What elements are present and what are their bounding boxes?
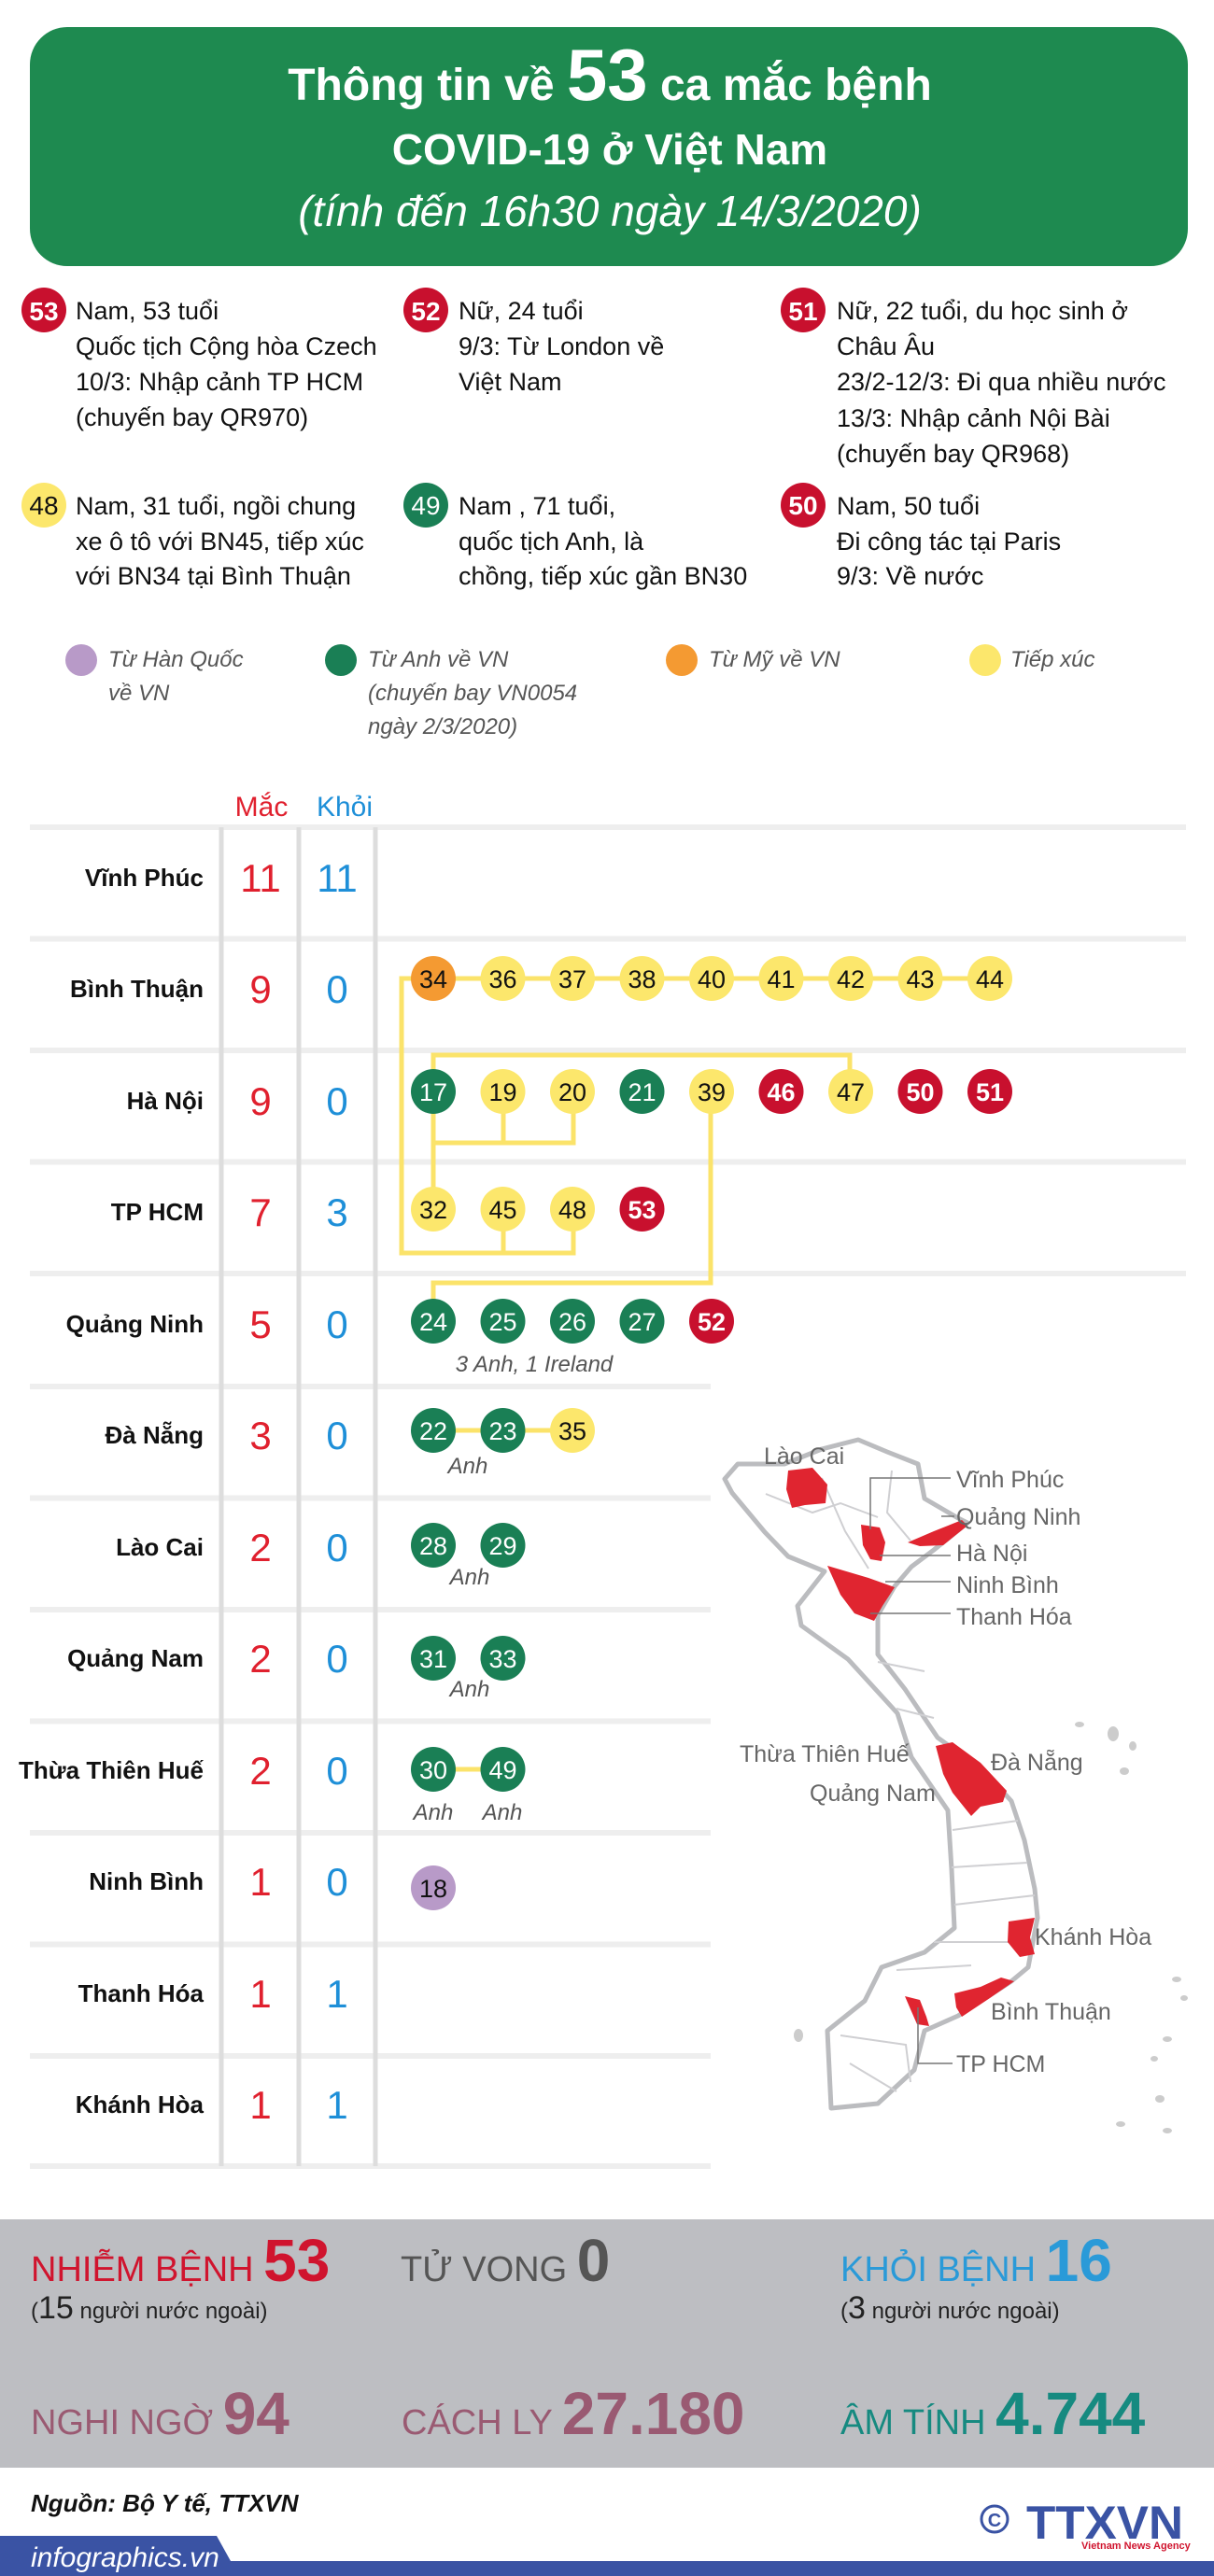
Binh Thuan cases: 41	[767, 965, 796, 993]
province names: Quảng Nam	[67, 1644, 204, 1672]
infected counts: 1	[249, 1972, 272, 2016]
Ha Noi cases: 47	[837, 1078, 865, 1106]
infected counts: 3	[249, 1414, 272, 1457]
legend: UK	[325, 644, 577, 739]
case 53: 53	[29, 297, 59, 326]
map labels: Lào Cai	[764, 1443, 844, 1470]
Quang Nam cases	[411, 1636, 525, 1681]
case 48	[21, 483, 364, 590]
legend: Korea	[65, 644, 244, 706]
recovered counts: 3	[326, 1190, 348, 1234]
stat: infected: NHIỄM BỆNH 53	[31, 2227, 330, 2294]
Da Nang cases	[411, 1408, 595, 1453]
stat: negative: ÂM TÍNH 4.744	[840, 2380, 1146, 2447]
map of Vietnam	[725, 1440, 1188, 2133]
Thua Thien Hue cases: 49	[488, 1756, 517, 1784]
infected counts: 9	[249, 967, 272, 1011]
map labels: Quảng Ninh	[956, 1504, 1080, 1530]
province names: Lào Cai	[116, 1533, 204, 1561]
Binh Thuan cases: 44	[976, 965, 1004, 993]
footer bar: infographics.vn	[31, 2542, 219, 2573]
stat: deaths: TỬ VONG 0	[401, 2227, 610, 2294]
Ha Noi cases: 51	[976, 1078, 1004, 1106]
province names: Quảng Ninh	[66, 1310, 204, 1338]
Da Nang cases: 22	[419, 1417, 447, 1445]
date line: (tính đến 16h30 ngày 14/3/2020)	[298, 187, 922, 235]
stat: recovered	[840, 2227, 1112, 2326]
case 50: Đi công tác tại Paris	[837, 528, 1061, 556]
subtitle: COVID-19 ở Việt Nam	[392, 125, 827, 174]
Quang Nam cases: 31	[419, 1645, 447, 1673]
case 49: chồng, tiếp xúc gần BN30	[459, 562, 747, 590]
case 48: xe ô tô với BN45, tiếp xúc	[76, 528, 364, 556]
map labels: Quảng Nam	[810, 1781, 936, 1807]
map labels: Hà Nội	[956, 1541, 1027, 1567]
logo: TTXVN: Vietnam News Agency	[1081, 2541, 1192, 2552]
map outline	[725, 1440, 1038, 2108]
infected counts	[240, 856, 281, 2127]
legend: UK: (chuyến bay VN0054	[368, 681, 577, 706]
legend: Korea: về VN	[108, 681, 170, 706]
case 49: Nam , 71 tuổi,	[459, 492, 615, 520]
recovered counts: 0	[326, 967, 348, 1011]
Ha Noi cases: 21	[628, 1078, 656, 1106]
case details	[21, 288, 1166, 590]
nationality notes: Anh	[412, 1800, 453, 1825]
stats band	[0, 2219, 1214, 2468]
header banner	[30, 27, 1188, 266]
stat: recovered: (3 người nước ngoài)	[840, 2290, 1060, 2326]
Ha Noi cases: 46	[767, 1078, 796, 1106]
case 51: Nữ, 22 tuổi, du học sinh ở	[837, 297, 1128, 325]
recovered counts: 0	[326, 1526, 348, 1570]
Ninh Binh case: 18	[419, 1875, 447, 1903]
title: Thông tin về 53 ca mắc bệnh	[288, 34, 932, 116]
infected counts: 9	[249, 1079, 272, 1123]
infected counts: 1	[249, 1860, 272, 1904]
logo: TTXVN: TTXVN	[1026, 2497, 1183, 2549]
infected counts: 2	[249, 1637, 272, 1681]
legend	[65, 644, 1094, 739]
case 50: 9/3: Về nước	[837, 562, 983, 590]
Binh Thuan cases	[411, 956, 1012, 1001]
Thua Thien Hue cases	[411, 1747, 525, 1792]
Quang Ninh cases: 52	[698, 1308, 726, 1336]
map labels: Bình Thuận	[991, 1999, 1111, 2025]
map labels: Thanh Hóa	[956, 1604, 1072, 1630]
recovered counts: 1	[326, 2083, 348, 2127]
TP HCM cases	[411, 1187, 665, 1232]
case 48: 48	[29, 491, 59, 520]
case 51: 23/2-12/3: Đi qua nhiều nước	[837, 368, 1166, 396]
map labels: Đà Nẵng	[991, 1749, 1083, 1776]
Ha Noi cases: 20	[558, 1078, 586, 1106]
Quang Ninh cases: 25	[488, 1308, 517, 1336]
TP HCM cases: 45	[488, 1196, 517, 1224]
Quang Ninh cases: 26	[558, 1308, 586, 1336]
bubbles: case numbers	[411, 956, 1012, 1910]
Ha Noi cases: 50	[906, 1078, 935, 1106]
province names	[19, 864, 205, 2119]
map red provinces	[786, 1468, 1035, 2026]
Ha Noi cases: 17	[419, 1078, 447, 1106]
Lao Cai cases: 28	[419, 1532, 447, 1560]
Quang Ninh cases: 27	[628, 1308, 656, 1336]
Da Nang cases: 23	[488, 1417, 517, 1445]
legend: contact	[969, 644, 1094, 676]
case 50: Nam, 50 tuổi	[837, 492, 980, 520]
Ha Noi cases	[411, 1069, 1012, 1114]
stat: infected	[31, 2227, 330, 2326]
map province borders	[766, 1471, 1035, 2091]
map labels: TP HCM	[956, 2051, 1045, 2077]
province names: Vĩnh Phúc	[85, 864, 204, 892]
legend: contact: Tiếp xúc	[1010, 647, 1094, 672]
province names: Thừa Thiên Huế	[19, 1756, 205, 1784]
map labels: Thừa Thiên Huế	[740, 1741, 910, 1767]
TP HCM cases: 48	[558, 1196, 586, 1224]
Quang Nam cases: 33	[488, 1645, 517, 1673]
case 49: 49	[411, 491, 441, 520]
case 49: quốc tịch Anh, là	[459, 528, 644, 556]
map labels: Khánh Hòa	[1035, 1924, 1151, 1950]
map labels: Vĩnh Phúc	[956, 1467, 1064, 1493]
province names: Đà Nẵng	[106, 1421, 204, 1449]
legend: UK: ngày 2/3/2020)	[368, 714, 517, 739]
recovered counts: 11	[317, 856, 358, 900]
Quang Ninh cases	[411, 1299, 734, 1344]
case 50	[781, 483, 1061, 590]
Ha Noi cases: 19	[488, 1078, 517, 1106]
stat: quarantine: CÁCH LY 27.180	[402, 2380, 745, 2447]
recovered counts: 0	[326, 1079, 348, 1123]
infected counts: 7	[249, 1190, 272, 1234]
column headers	[235, 792, 373, 823]
recovered counts	[317, 856, 358, 2127]
TP HCM cases: 53	[628, 1196, 656, 1224]
recovered counts: 0	[326, 1637, 348, 1681]
case 52: Việt Nam	[459, 368, 562, 396]
recovered counts: 0	[326, 1302, 348, 1346]
case 51: (chuyến bay QR968)	[837, 440, 1069, 468]
column headers: Mắc	[235, 792, 288, 823]
nationality notes: Anh	[448, 1677, 489, 1702]
case 52: 9/3: Từ London về	[459, 332, 664, 360]
Da Nang cases: 35	[558, 1417, 586, 1445]
infected counts: 5	[249, 1302, 272, 1346]
case 52: 52	[411, 297, 441, 326]
table grid	[30, 827, 1186, 2166]
stat: recovered: KHỎI BỆNH 16	[840, 2227, 1112, 2294]
footer bar	[0, 2536, 1214, 2576]
case 52: Nữ, 24 tuổi	[459, 297, 584, 325]
TP HCM cases: 32	[419, 1196, 447, 1224]
recovered counts: 1	[326, 1972, 348, 2016]
map labels: Ninh Bình	[956, 1572, 1059, 1598]
recovered counts: 0	[326, 1860, 348, 1904]
province names: Bình Thuận	[70, 975, 204, 1003]
map islands	[794, 1722, 1188, 2133]
case 48: với BN34 tại Bình Thuận	[76, 562, 351, 590]
case 52	[403, 288, 664, 396]
stat: infected: (15 người nước ngoài)	[31, 2290, 268, 2326]
column headers: Khỏi	[317, 792, 373, 823]
infected counts: 11	[240, 856, 281, 900]
case 53: Nam, 53 tuổi	[76, 297, 219, 325]
case 51	[781, 288, 1166, 468]
Quang Ninh cases: 24	[419, 1308, 447, 1336]
source: Nguồn: Bộ Y tế, TTXVN	[31, 2489, 300, 2517]
case 53: (chuyến bay QR970)	[76, 403, 308, 431]
Ninh Binh case	[411, 1865, 456, 1910]
case 53: Quốc tịch Cộng hòa Czech	[76, 332, 377, 360]
Lao Cai cases: 29	[488, 1532, 517, 1560]
case 49	[403, 483, 747, 590]
case 51: Châu Âu	[837, 331, 935, 360]
case 53: 10/3: Nhập cảnh TP HCM	[76, 368, 363, 396]
Binh Thuan cases: 36	[488, 965, 517, 993]
logo: TTXVN: C	[988, 2511, 1001, 2531]
recovered counts: 0	[326, 1414, 348, 1457]
stat: suspected: NGHI NGỜ 94	[31, 2380, 289, 2447]
recovered counts: 0	[326, 1749, 348, 1793]
province names: Hà Nội	[127, 1087, 204, 1115]
nationality notes: Anh	[448, 1565, 489, 1590]
Thua Thien Hue cases: 30	[419, 1756, 447, 1784]
infected counts: 2	[249, 1749, 272, 1793]
case 48: Nam, 31 tuổi, ngồi chung	[76, 492, 356, 520]
province names: Thanh Hóa	[78, 1979, 205, 2007]
Binh Thuan cases: 43	[906, 965, 935, 993]
Binh Thuan cases: 40	[698, 965, 726, 993]
nationality notes: Anh	[481, 1800, 522, 1825]
infected counts: 1	[249, 2083, 272, 2127]
connector lines	[402, 978, 990, 1769]
nationality notes: 3 Anh, 1 Ireland	[456, 1352, 614, 1377]
Ha Noi cases: 39	[698, 1078, 726, 1106]
legend: UK: Từ Anh về VN	[368, 647, 509, 672]
map leader lines	[870, 1478, 954, 2063]
Binh Thuan cases: 38	[628, 965, 656, 993]
case 51: 13/3: Nhập cảnh Nội Bài	[837, 404, 1110, 432]
case 51: 51	[788, 297, 818, 326]
province names: Khánh Hòa	[76, 2090, 205, 2119]
nationality notes: Anh	[446, 1454, 487, 1479]
case 50: 50	[788, 491, 818, 520]
province names: Ninh Bình	[89, 1867, 204, 1895]
legend: US	[666, 644, 840, 676]
nationality notes	[412, 1352, 614, 1825]
Binh Thuan cases: 34	[419, 965, 447, 993]
Binh Thuan cases: 42	[837, 965, 865, 993]
Lao Cai cases	[411, 1523, 525, 1568]
legend: Korea: Từ Hàn Quốc	[108, 647, 244, 672]
Binh Thuan cases: 37	[558, 965, 586, 993]
logo: TTXVN	[981, 2497, 1192, 2552]
legend: US: Từ Mỹ về VN	[709, 647, 840, 672]
map labels	[740, 1443, 1151, 2077]
infected counts: 2	[249, 1526, 272, 1570]
case 53	[21, 288, 377, 431]
province names: TP HCM	[111, 1198, 204, 1226]
